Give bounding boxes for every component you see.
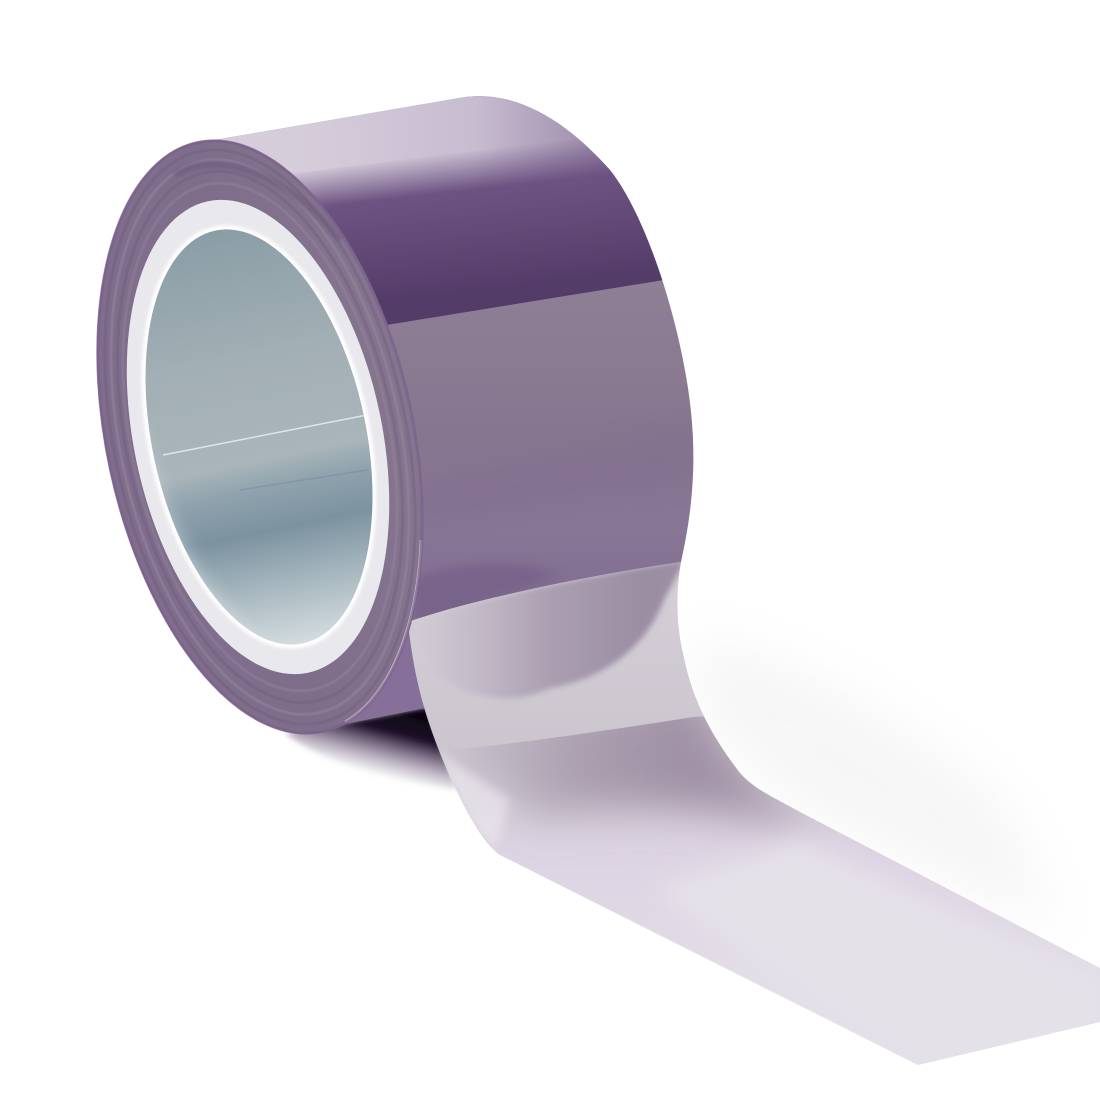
white core ring (87, 175, 429, 699)
cast shadow on surface (690, 640, 1060, 930)
unrolled tape strip (400, 560, 1100, 1070)
roll side face (47, 110, 473, 764)
strip: lower reflection band (474, 716, 808, 838)
surface: lower shaded band (693, 446, 694, 468)
hollow: left white fade (155, 462, 250, 630)
surface: dark reflection band (292, 143, 662, 325)
side: wrapped layer rings (56, 121, 464, 753)
strip: pale end section (680, 840, 942, 924)
hollow: inner seam line (163, 415, 367, 455)
strip: upper reflection dome (400, 560, 685, 698)
side: darker top arc (175, 165, 340, 240)
tape roll outer surface (200, 90, 700, 750)
strip: white highlight at left edge (440, 754, 510, 843)
surface: purple visible below rim (348, 634, 424, 724)
surface: dark curved reflection (418, 564, 548, 616)
side: pale rim edge (345, 540, 421, 722)
hollow: second faint line (240, 470, 367, 490)
side: purple rim tint (48, 111, 472, 763)
core hollow interior (141, 225, 377, 649)
contact shadow under roll (285, 706, 458, 790)
surface: top highlight (216, 96, 606, 202)
